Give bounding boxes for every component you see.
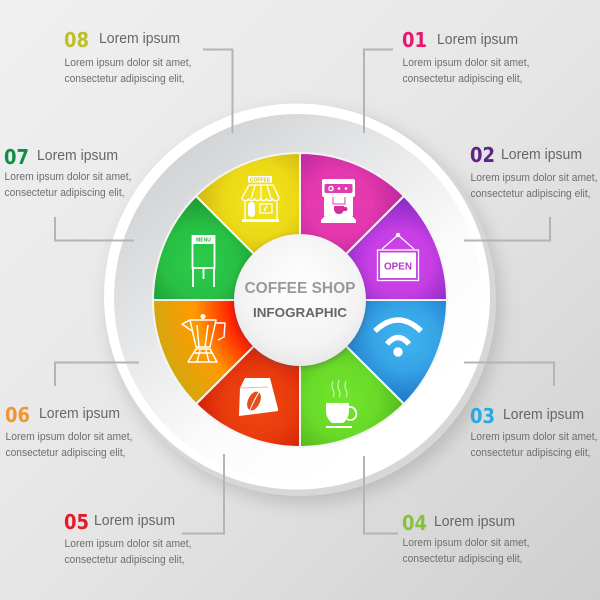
callout 08	[64, 28, 232, 133]
wedge 06 orange	[153, 300, 300, 404]
body 03: consectetur adipiscing elit,	[470, 447, 590, 459]
title 08: Lorem ipsum	[99, 31, 180, 47]
body 04: consectetur adipiscing elit,	[402, 553, 522, 565]
title 03: Lorem ipsum	[503, 407, 584, 423]
label: coffee: COFFEE	[250, 178, 271, 184]
body 08: consectetur adipiscing elit,	[64, 73, 184, 85]
body 02: consectetur adipiscing elit,	[470, 188, 590, 200]
panel: disc rim	[104, 104, 496, 496]
icon: moka pot	[182, 315, 225, 362]
wedge 08 yellow	[196, 153, 300, 300]
panel: outer white ring	[104, 104, 490, 490]
icon: open sign	[378, 233, 418, 280]
pie chart: eight coffee shop wedges	[153, 153, 447, 447]
number 02: 02	[470, 143, 495, 167]
heading: coffee shop: COFFEE SHOP	[244, 280, 356, 297]
number 07: 07	[4, 145, 29, 169]
wedge 02 purple	[300, 196, 447, 300]
number 04: 04	[402, 511, 427, 535]
body 08: Lorem ipsum dolor sit amet,	[64, 57, 192, 69]
icon: coffee storefront	[242, 176, 279, 222]
wedge 05 red	[196, 300, 300, 447]
icon: espresso machine	[321, 179, 356, 223]
number 01: 01	[402, 28, 427, 52]
callout 07	[4, 145, 134, 240]
title 04: Lorem ipsum	[434, 514, 515, 530]
number 08: 08	[64, 28, 89, 52]
callout 03	[464, 362, 598, 459]
body 07: Lorem ipsum dolor sit amet,	[4, 171, 132, 183]
callout 06	[5, 362, 139, 459]
title 07: Lorem ipsum	[37, 148, 118, 164]
callout 01	[364, 28, 530, 133]
title 02: Lorem ipsum	[501, 147, 582, 163]
center circle shadow	[234, 236, 366, 368]
wedge 07 dark green	[153, 196, 300, 300]
icon: coffee cup	[326, 380, 356, 428]
body 06: Lorem ipsum dolor sit amet,	[6, 431, 132, 443]
body 04: Lorem ipsum dolor sit amet,	[402, 537, 530, 549]
body 01: Lorem ipsum dolor sit amet,	[402, 57, 530, 69]
label: open: OPEN	[384, 260, 412, 272]
panel: inner disc	[114, 114, 482, 482]
wedge 03 blue	[300, 300, 447, 404]
callout 05	[64, 454, 224, 566]
icon: menu board	[192, 235, 215, 287]
title 06: Lorem ipsum	[39, 406, 120, 422]
title 05: Lorem ipsum	[94, 513, 175, 529]
body 06: consectetur adipiscing elit,	[6, 447, 126, 459]
heading: infographic: INFOGRAPHIC	[253, 305, 348, 320]
body 05: Lorem ipsum dolor sit amet,	[64, 538, 192, 550]
wedge 04 green	[300, 300, 404, 447]
body 05: consectetur adipiscing elit,	[64, 554, 184, 566]
body 01: consectetur adipiscing elit,	[402, 73, 522, 85]
shadow under disc	[109, 111, 501, 503]
panel: center circle	[234, 234, 366, 366]
number 05: 05	[64, 510, 89, 534]
number 06: 06	[5, 403, 30, 427]
wedge 01 magenta	[300, 153, 404, 300]
icon: wifi	[375, 320, 421, 357]
title 01: Lorem ipsum	[437, 32, 518, 48]
callout 02	[464, 143, 598, 240]
callout 04	[364, 456, 530, 565]
number 03: 03	[470, 404, 495, 428]
label: menu: MENU	[196, 238, 211, 244]
icon: coffee bag	[239, 378, 278, 416]
body 07: consectetur adipiscing elit,	[4, 187, 124, 199]
